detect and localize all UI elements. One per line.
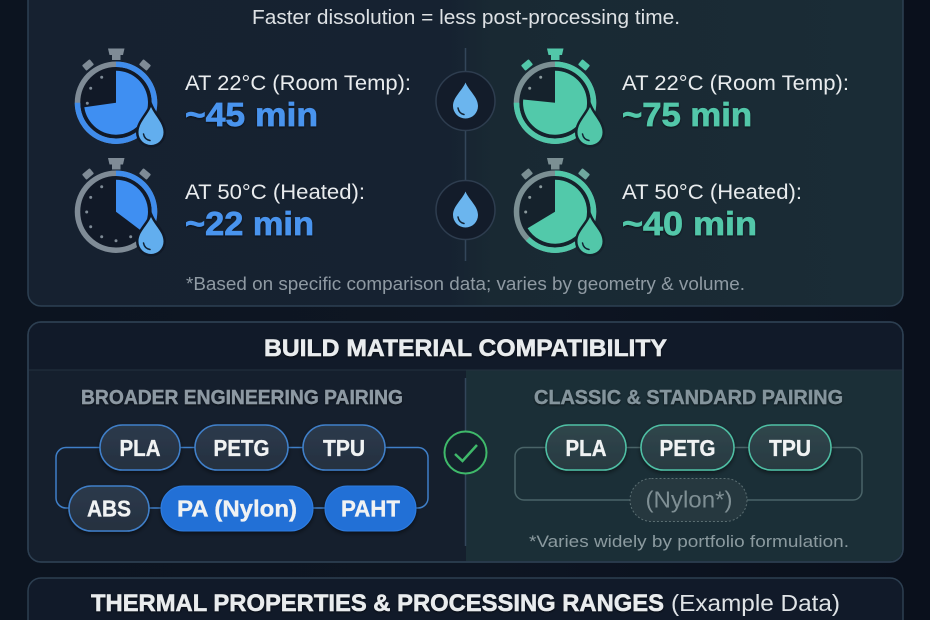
pill: PETG [195, 425, 288, 470]
text: 40 min heated: AT 50°C (Heated): [622, 181, 802, 204]
connector lines [56, 448, 428, 508]
connector box [515, 448, 862, 500]
pill: ABS: ABS [87, 496, 131, 522]
icon: blue stopwatch 22C [78, 48, 164, 145]
text: 40 min heated [622, 181, 802, 242]
text: 45 min at room temp: ~45 min [185, 96, 318, 133]
text: 45 min at room temp: AT 22°C (Room Temp): [185, 72, 411, 95]
centre divider with drop icons [436, 48, 495, 261]
pill: PAHT [325, 486, 416, 531]
icon: green check [444, 432, 486, 474]
pill: Nylon dashed: (Nylon*) [646, 486, 732, 512]
heading: thermal properties: THERMAL PROPERTIES & PROCESSING RANGES [91, 590, 664, 617]
pill: TPU [303, 425, 385, 470]
icon: teal stopwatch 22C [516, 48, 602, 145]
panel: dissolution time [28, 0, 903, 306]
text: 22 min heated: AT 50°C (Heated): [185, 181, 365, 204]
pill: PLA: PLA [120, 435, 160, 461]
pill: ABS [69, 486, 149, 531]
text: 22 min heated [185, 181, 365, 242]
pill: PA Nylon [161, 486, 313, 531]
pill: PLA [100, 425, 180, 470]
subheading: classic standard: CLASSIC & STANDARD PAIRING [534, 387, 843, 409]
footnote: portfolio formulation: *Varies widely by portfolio formulation. [529, 532, 849, 551]
left column: broader engineering pairing [56, 387, 428, 531]
subtitle: faster dissolution: Faster dissolution = less post-processing time. [252, 7, 680, 29]
pill: PLA: PLA [566, 435, 606, 461]
icon: teal stopwatch 50C [516, 158, 602, 254]
text: 75 min at room temp [622, 72, 849, 133]
text: 75 min at room temp: AT 22°C (Room Temp): [622, 72, 849, 95]
heading: thermal properties: (Example Data) [671, 590, 840, 616]
panel: build material compatibility [28, 322, 903, 562]
pill: TPU: TPU [323, 435, 365, 461]
pill: TPU: TPU [769, 435, 811, 461]
pill: TPU [749, 425, 831, 470]
text: 45 min at room temp [185, 72, 411, 133]
pill: Nylon dashed [630, 478, 747, 522]
footnote: comparison data: *Based on specific comparison data; varies by geometry & volume. [186, 274, 745, 294]
pill: PETG [641, 425, 734, 470]
pill: PA Nylon: PA (Nylon) [177, 496, 297, 522]
pill: PLA [546, 425, 626, 470]
text: 22 min heated: ~22 min [185, 205, 314, 242]
heading: build material compatibility: BUILD MATERIAL COMPATIBILITY [264, 335, 667, 362]
right column: classic and standard pairing [515, 387, 862, 551]
panel: thermal properties [28, 578, 903, 620]
icon: blue stopwatch 50C [78, 158, 164, 254]
text: 40 min heated: ~40 min [622, 205, 757, 242]
text: 75 min at room temp: ~75 min [622, 96, 752, 133]
pill: PETG: PETG [214, 435, 270, 461]
pill: PETG: PETG [660, 435, 716, 461]
pill: PAHT: PAHT [341, 496, 400, 522]
subheading: broader engineering: BROADER ENGINEERING PAIRING [81, 387, 403, 409]
